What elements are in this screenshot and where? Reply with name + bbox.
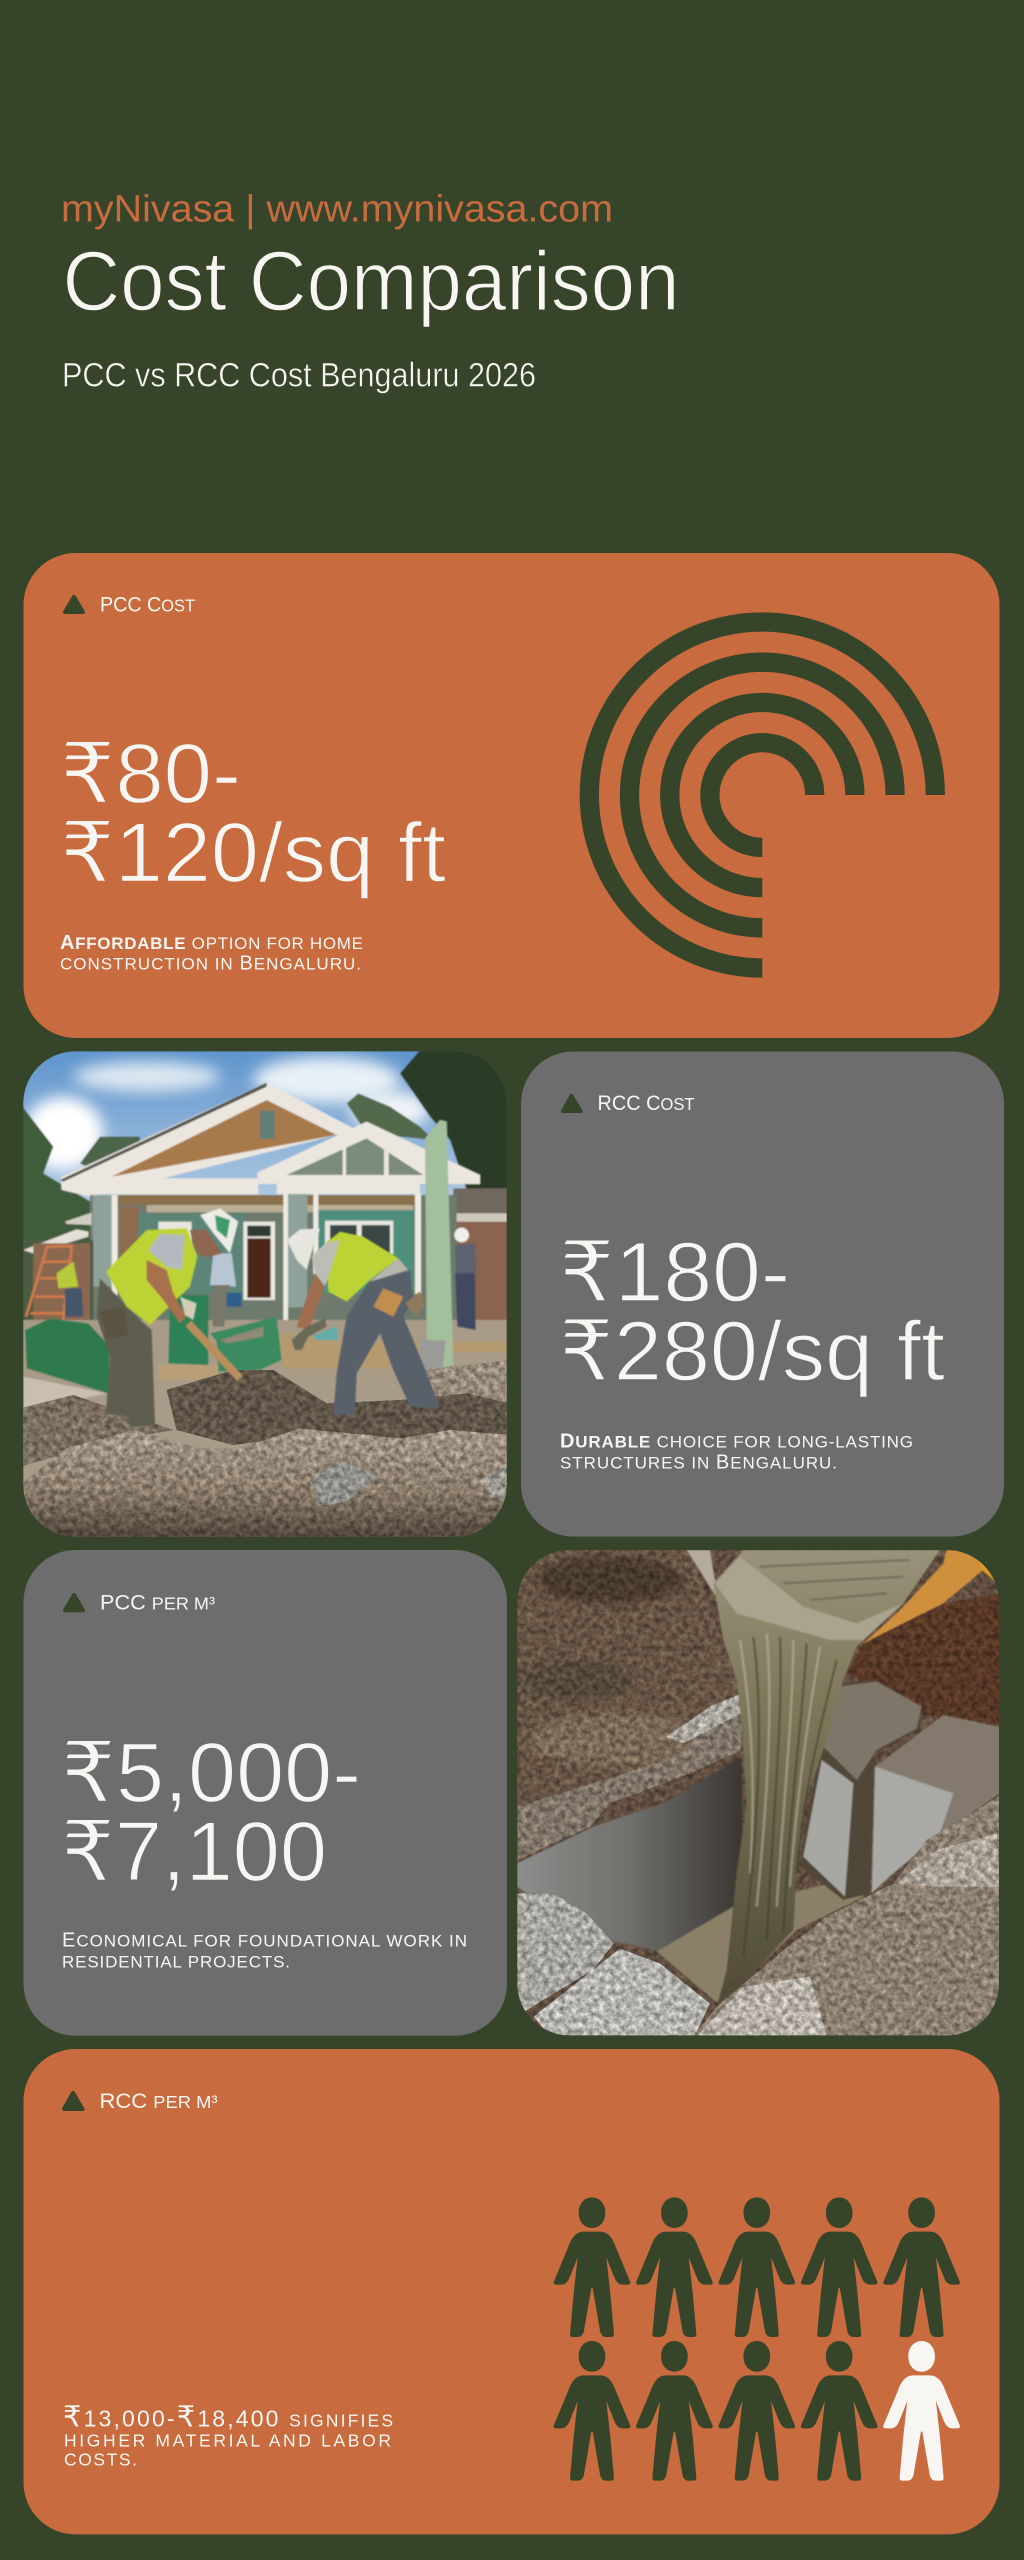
subtitle: PCC vs RCC Cost Bengaluru 2026 [62, 356, 536, 394]
label: RCC PER M³ [100, 2090, 218, 2113]
label: RCC COST [598, 1092, 695, 1115]
icon: triangle marker [65, 597, 83, 612]
description [63, 2402, 393, 2469]
panel: RCC per cubic metre [24, 2049, 1000, 2534]
price: ₹180- [559, 1225, 790, 1319]
price [60, 726, 446, 900]
price: ₹120/sq ft [60, 806, 446, 900]
photo: concrete pouring into a foundation trench [517, 1550, 999, 2036]
icon: triangle marker [64, 2093, 82, 2109]
panel: PCC per cubic metre [24, 1550, 507, 2036]
brand line: myNivasa | www.mynivasa.com [61, 188, 613, 230]
description: HIGHER MATERIAL AND LABOR [64, 2430, 391, 2450]
label: PCC PER M³ [100, 1591, 215, 1614]
description: ECONOMICAL FOR FOUNDATIONAL WORK IN [62, 1930, 467, 1952]
photo: workers at a house construction site [23, 1051, 507, 1537]
panel: RCC cost [521, 1052, 1004, 1536]
description [62, 1930, 467, 1971]
title: Cost Comparison [62, 234, 680, 328]
description: COSTS. [64, 2449, 137, 2469]
description: AFFORDABLE OPTION FOR HOME [60, 932, 363, 954]
pictogram: ten people, one highlighted [554, 2197, 960, 2481]
description: CONSTRUCTION IN BENGALURU. [60, 952, 361, 974]
chart: concentric arcs [589, 622, 935, 968]
price: ₹5,000- [61, 1726, 361, 1820]
price: ₹7,100 [61, 1805, 327, 1899]
price [559, 1225, 945, 1398]
panel: PCC cost [24, 553, 1000, 1038]
label: PCC COST [100, 594, 195, 616]
description [560, 1430, 913, 1473]
icon: triangle marker [563, 1096, 580, 1111]
description [60, 932, 363, 974]
price: ₹80- [60, 726, 241, 820]
description: RESIDENTIAL PROJECTS. [62, 1952, 290, 1971]
price: ₹280/sq ft [559, 1304, 945, 1398]
price [61, 1726, 361, 1899]
description: DURABLE CHOICE FOR LONG-LASTING [560, 1430, 913, 1452]
header [61, 188, 680, 394]
description: STRUCTURES IN BENGALURU. [560, 1451, 837, 1473]
description: ₹13,000-₹18,400 SIGNIFIES [63, 2402, 393, 2434]
icon: triangle marker [65, 1595, 83, 1610]
